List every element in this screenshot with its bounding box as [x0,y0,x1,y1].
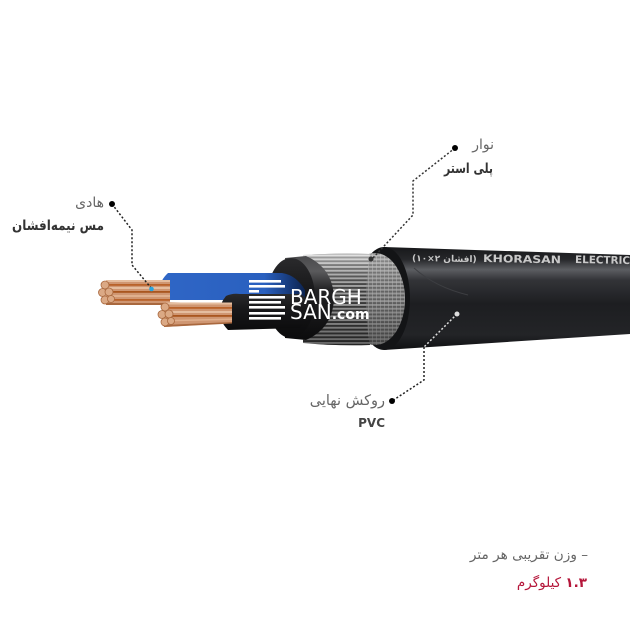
label: tape [443,137,494,177]
label: tape: نوار [471,137,494,153]
armour shading [303,254,370,345]
leader: outer sheath [389,312,460,404]
label: outer sheath [310,393,385,430]
outer PVC sheath [384,247,630,350]
upper copper conductor [98,280,170,305]
cable marking: Persian part: (افشان ۲×۱۰) [412,254,477,265]
weight heading: – وزن تقریبی هر متر [469,547,588,563]
sheath end ring [358,247,410,350]
cable marking: KHORASAN: KHORASAN [483,253,561,266]
watermark logo [249,280,370,324]
label: outer sheath: روکش نهایی [310,393,385,409]
logo wordmark: BARGH [290,285,362,309]
bedding front face [267,258,315,338]
black insulated core [219,294,312,330]
leader: polyester tape [368,145,458,262]
polyester tape layer [345,253,405,345]
lower copper conductor [158,302,232,327]
leader: conductor [109,201,154,291]
sheath crease [414,268,468,295]
label: conductor: مس نیمه‌افشان [12,218,104,234]
weight value: ۱.۳ کیلوگرم [517,574,588,591]
label: tape: پلی استر [443,161,493,177]
tape shading [345,253,405,345]
cable illustration [98,247,630,350]
blue insulated core [160,273,305,300]
cable marking: ELECTRIC: ELECTRIC [575,254,630,267]
black bedding cylinder [285,256,334,340]
logo stripes [249,280,285,320]
label: conductor [12,195,104,234]
steel armour wires [303,254,370,345]
label: conductor: هادی [75,195,104,211]
watermark logo: SAN.com [290,300,370,324]
label: outer sheath: PVC [358,416,385,430]
